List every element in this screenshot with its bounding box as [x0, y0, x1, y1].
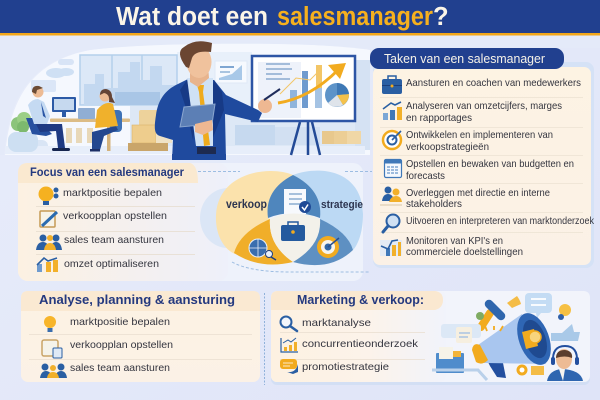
seated woman with laptop [78, 89, 122, 152]
verkoop circle [216, 171, 293, 254]
strategie label: strategie [321, 199, 363, 211]
icon: KPI chart [380, 240, 402, 256]
overlap: target [293, 219, 353, 265]
overlap: globe [234, 219, 293, 265]
icon: lightbulb [38, 186, 58, 205]
pointing hand and pen [258, 99, 272, 113]
head [190, 65, 209, 87]
icon: thumbs up [551, 324, 580, 341]
task text 5 [406, 187, 550, 210]
cardboard boxes left [128, 110, 172, 151]
icon: megaphone [472, 308, 557, 378]
task text 7: Monitoren van KPI's en [406, 235, 503, 247]
background shapes [5, 59, 370, 154]
venn diagram [198, 171, 372, 272]
task text 4: forecasts [406, 170, 445, 182]
shirt and tie [187, 78, 213, 146]
icon: folder [436, 347, 464, 373]
focus item 1: marktpositie bepalen [63, 187, 162, 199]
icon: lightbulb [44, 316, 56, 332]
office window [80, 55, 177, 105]
marketing item 3: promotiestrategie [302, 361, 389, 373]
salesman presenting [155, 41, 280, 160]
presentation board [252, 56, 355, 155]
icon: target [383, 131, 401, 149]
icon: briefcase [382, 76, 402, 94]
marketing heading [271, 291, 443, 310]
header banner [0, 0, 600, 36]
icon: chat box [441, 324, 481, 343]
icon: small lightbulb [558, 304, 571, 320]
analyse heading [21, 291, 260, 311]
focus item 2: verkoopplan opstellen [63, 210, 167, 222]
marketing item 1: marktanalyse [302, 317, 371, 329]
office illustration [0, 36, 600, 160]
desk [50, 118, 130, 151]
icon: magnifier [383, 214, 400, 232]
marketing illustration [432, 293, 583, 381]
task text 7 [406, 235, 523, 258]
icon: team [36, 234, 62, 250]
title: salesmanager [277, 3, 433, 31]
icon: heart [507, 296, 521, 308]
icon: team [40, 364, 67, 378]
icon: planning clipboard [42, 340, 62, 358]
center: briefcase [270, 214, 320, 262]
focus heading: Focus van een salesmanager [30, 167, 184, 179]
task text 2: Analyseren van omzetcijfers, marges [406, 100, 562, 112]
task text 2 [406, 100, 562, 124]
analyse item 2: verkoopplan opstellen [70, 339, 173, 351]
focus item 4: omzet optimaliseren [64, 258, 159, 270]
tablet [180, 104, 215, 127]
analyse item 3: sales team aansturen [70, 362, 170, 374]
marketing heading: Marketing & verkoop: [297, 293, 424, 307]
title: Wat doet een [116, 3, 268, 31]
task text 3: Ontwikkelen en implementeren van [406, 129, 553, 141]
icon: chat bubble [525, 293, 552, 318]
icon: ads logo [476, 304, 501, 327]
verkoop label: verkoop [226, 199, 267, 211]
icon: speech bubbles [280, 359, 298, 374]
jacket [155, 79, 262, 160]
icon: calendar [384, 160, 402, 178]
icon: magnifier [280, 316, 297, 331]
focus heading [18, 163, 198, 183]
bar chart on board [278, 63, 346, 108]
heading pill [370, 48, 564, 69]
icon: mail [516, 364, 544, 376]
cardboard boxes right [322, 131, 361, 144]
analyse heading: Analyse, planning & aansturing [39, 292, 235, 307]
heading pill: Taken van een salesmanager [384, 51, 546, 66]
icon: growth chart [37, 258, 58, 272]
task text 5: stakeholders [406, 198, 462, 210]
task text 5: Overleggen met directie en interne [406, 187, 550, 199]
icon: clipboard pen [40, 211, 57, 227]
panel: marketing en verkoop [271, 291, 590, 385]
analyse item 1: marktpositie bepalen [70, 316, 170, 328]
title [116, 3, 449, 31]
marketing item 2: concurrentieonderzoek [302, 338, 419, 350]
icon: growth bars [383, 102, 402, 120]
strategie circle [293, 171, 363, 250]
task text 7: commerciele doelstellingen [406, 246, 523, 258]
task text 3 [406, 129, 553, 153]
task text 3: verkoopstrategieën [406, 141, 489, 153]
task text 2: en rapportages [406, 112, 472, 124]
panel: taken van een salesmanager [370, 48, 595, 268]
pie chart on board [325, 83, 349, 107]
icon: analysis chart [281, 338, 298, 352]
task text 1: Aansturen en coachen van medewerkers [406, 77, 581, 89]
title: ? [433, 3, 449, 31]
panel: focus van een salesmanager [18, 163, 363, 281]
plant [8, 112, 38, 152]
task text 4: Opstellen en bewaken van budgetten en [406, 158, 574, 170]
icon: support agent [547, 346, 583, 381]
focus item 3: sales team aansturen [64, 234, 164, 246]
icon: people [380, 186, 402, 205]
panel: analyse, planning en aansturing [21, 291, 260, 382]
overlap: document [268, 175, 320, 218]
task text 4 [406, 158, 574, 182]
seated man at desk [26, 86, 76, 151]
